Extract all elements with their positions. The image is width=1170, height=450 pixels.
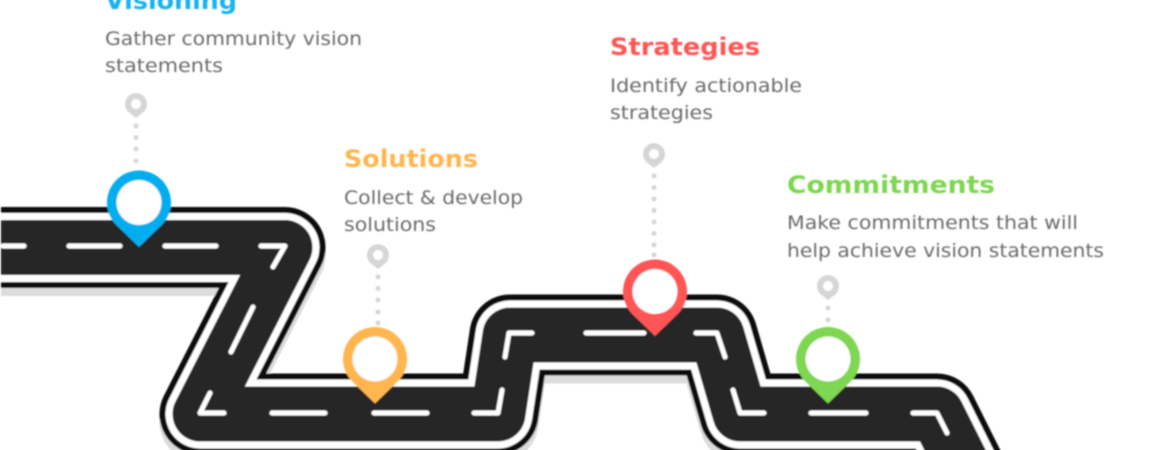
map pin: orange [343, 327, 407, 404]
text block: Visioning: statements [105, 55, 223, 77]
marker: Strategies [623, 143, 687, 336]
small pin: Solutions [367, 244, 389, 326]
map pin: blue [107, 171, 171, 247]
text block: Strategies: strategies [610, 102, 713, 124]
text block: Visioning: Gather community vision [105, 28, 362, 50]
text block: Commitments: Commitments [787, 171, 995, 199]
small pin: Commitments [817, 275, 839, 322]
text block: Strategies: Strategies [610, 33, 760, 61]
text block: Strategies: Identify actionable [610, 75, 802, 97]
map pin: green [796, 327, 860, 404]
road centre dashes [3, 246, 947, 433]
marker: Commitments [796, 275, 860, 404]
map pin: red [623, 260, 687, 336]
text block: Commitments: help achieve vision statements [787, 240, 1104, 262]
road: winding asphalt path [1, 246, 985, 450]
small pin: Visioning [125, 93, 147, 164]
text block: Commitments [787, 171, 1104, 262]
text block: Commitments: Make commitments that will [787, 212, 1078, 234]
text block: Strategies [610, 33, 802, 124]
text block: Solutions: Solutions [344, 145, 478, 173]
marker: Solutions [343, 244, 407, 404]
text block: Solutions: solutions [344, 214, 436, 236]
text block: Solutions [344, 145, 523, 236]
text block: Solutions: Collect & develop [344, 187, 523, 209]
small pin: Strategies [643, 143, 665, 258]
text block: Visioning [105, 0, 362, 77]
marker: Visioning [107, 93, 171, 247]
